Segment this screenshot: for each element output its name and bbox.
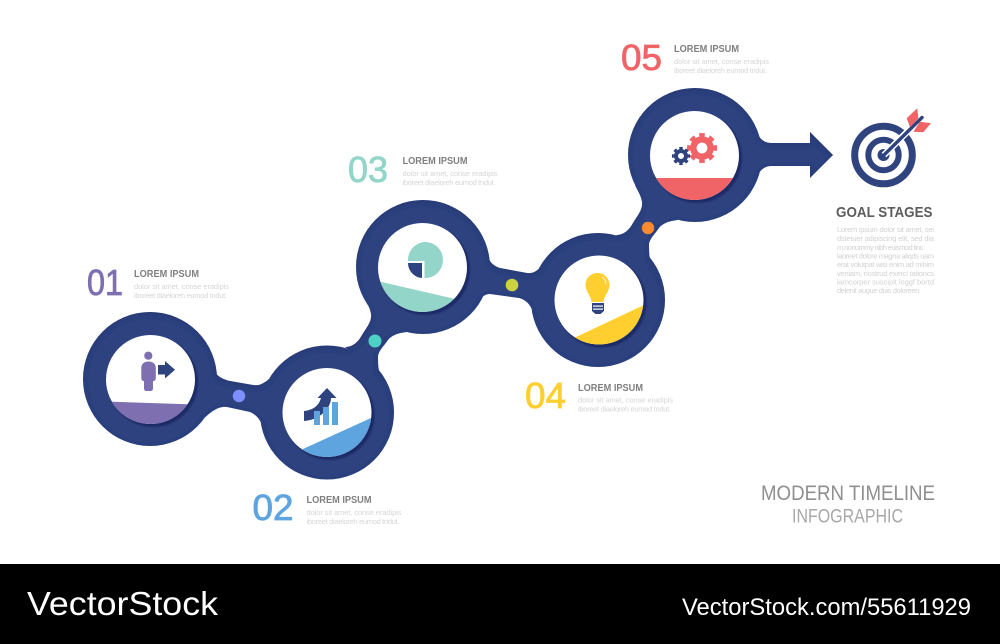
icon: growth chart <box>304 388 338 425</box>
goal stages paragraph: dstetuer adipiscing elit, sed dia <box>837 234 935 243</box>
text block 05: LOREM IPSUM <box>674 43 739 55</box>
footer band <box>0 564 1000 644</box>
goal stages paragraph <box>837 225 935 295</box>
step 04 <box>525 256 673 416</box>
goal stages paragraph: Lorem ipsum dolor sit amet, sei <box>837 225 934 234</box>
text block 04: LOREM IPSUM <box>578 382 643 394</box>
goal stages paragraph: veniam, nostrud exerci tationcs <box>837 269 934 278</box>
connector dot 3 <box>506 279 518 291</box>
footer image id: VectorStock.com/55611929 <box>682 594 971 621</box>
title: MODERN TIMELINE <box>761 482 935 505</box>
text block 03: dolor sit amet, conse eradipis <box>402 169 498 178</box>
number 03: 03 <box>348 149 388 190</box>
text block 03: iboreet diaeloreh eumod tndut. <box>402 178 496 187</box>
text block 05: iboreet diaeloreh eumod tndut. <box>674 66 767 75</box>
step 04 window <box>554 256 646 348</box>
step 03 window <box>377 223 470 315</box>
step 05 window <box>649 111 742 203</box>
text block 05: dolor sit amet, conse eradipis <box>674 57 769 66</box>
text block 05 <box>674 43 769 75</box>
icon: person with arrow <box>141 352 175 391</box>
text block 03: LOREM IPSUM <box>402 155 468 167</box>
icon: gears <box>673 135 715 164</box>
goal stages paragraph: delenit augue duis doloreen. <box>837 286 921 295</box>
text block 02: dolor sit amet, conse eradipis <box>306 508 402 517</box>
goal stages paragraph: m nonummy nibh euismod tinc. <box>837 243 925 252</box>
connector dot 4 <box>642 222 654 234</box>
text block 04: dolor sit amet, conse eradipis <box>578 396 673 404</box>
text block 04 <box>578 382 673 414</box>
step 01 <box>87 262 229 427</box>
goal stages paragraph: laoreet dolore magna aliqds uam <box>837 252 934 260</box>
timeline track with arrow <box>83 88 833 480</box>
text block 01: dolor sit amet, conse eradipis <box>134 282 229 291</box>
footer brand: VectorStock <box>27 585 219 622</box>
text block 01: LOREM IPSUM <box>134 268 199 280</box>
text block 01: iboreet diaeloreh eumod tndut. <box>134 291 227 300</box>
step 01 window <box>105 335 198 427</box>
goal stages heading: GOAL STAGES <box>836 204 932 221</box>
step 02 window <box>282 368 374 460</box>
step 02 <box>252 368 402 528</box>
icon: target with arrow <box>855 108 931 184</box>
title <box>761 482 935 528</box>
number 01: 01 <box>87 262 123 303</box>
text block 04: iboreet diaeloreh eumod tndut. <box>578 404 671 414</box>
goal stages paragraph: erat volutpat wisi enim ad minim <box>837 260 934 269</box>
connector dot 1 <box>233 390 245 402</box>
text block 03 <box>402 155 498 187</box>
step 05 <box>621 37 769 203</box>
goal stages paragraph: lamcorper suscipit loggf bortd <box>837 278 934 286</box>
icon: light bulb <box>586 273 610 314</box>
number 04: 04 <box>525 375 566 416</box>
text block 02: iboreet diaeloreh eumod tndut. <box>306 517 400 526</box>
title: INFOGRAPHIC <box>792 506 903 528</box>
text block 01 <box>134 268 229 300</box>
number 05: 05 <box>621 37 662 78</box>
icon: pie chart <box>408 242 443 278</box>
connector dot 2 <box>368 334 382 348</box>
text block 02: LOREM IPSUM <box>306 494 372 506</box>
text block 02 <box>306 494 402 526</box>
step 03 <box>348 149 498 315</box>
number 02: 02 <box>252 487 294 528</box>
